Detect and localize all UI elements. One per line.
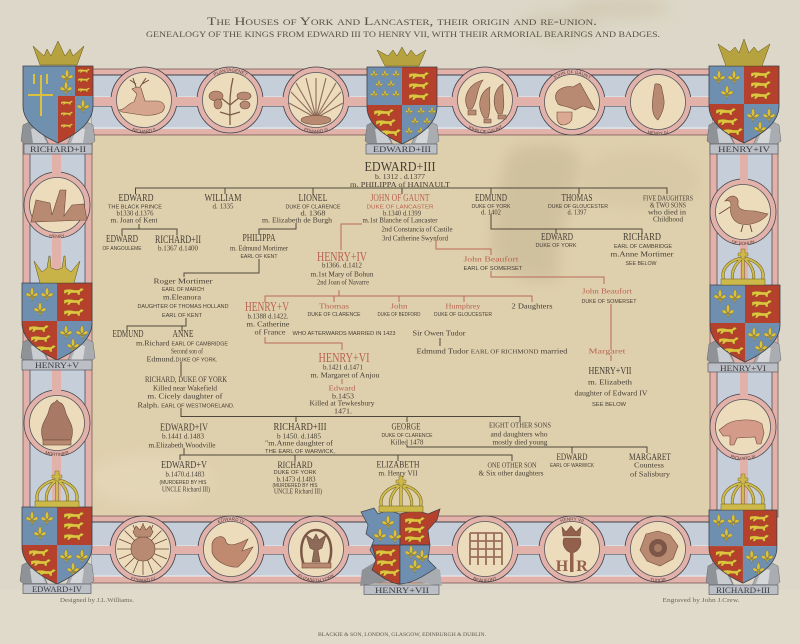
person: Richard II: b.1367 d.1400	[158, 244, 198, 252]
crown: Henry VII	[379, 476, 423, 512]
person: John of Gaunt: 2nd Constancia of Castile	[382, 224, 453, 234]
person: Humphrey of Gloucester	[434, 302, 492, 318]
person: Edward the Black Prince: m. Joan of Kent	[110, 216, 158, 224]
person: Edward Earl of Warwick: EARL OF WARWICK	[550, 463, 595, 469]
banner: Edward III: EDWARD+III	[373, 144, 431, 154]
person: John Beaufort Duke of Somerset: John Beaufort	[582, 286, 633, 296]
person: John Beaufort Earl of Somerset: EARL OF SOMERSET	[464, 266, 522, 272]
medallion: Plantagenet broom: PLANTAGENET	[213, 68, 248, 76]
panel: right border column	[710, 137, 778, 518]
medallion: Edward IV lion-swan: EDWARD IV	[218, 517, 245, 524]
medallion: Edward IV rose en soleil	[115, 521, 171, 582]
person: Richard Duke of York: Ralph. EARL OF WESTMORELAND.	[138, 400, 234, 410]
medallion: Henry badge	[29, 177, 88, 238]
person: Edward Duke of York: DUKE OF YORK	[536, 243, 577, 249]
medallion: Edward III sunburst: EDWARD III	[304, 128, 328, 133]
panel: central genealogy background	[90, 135, 710, 517]
person: Anne Mortimer: ANNE	[172, 329, 194, 340]
connectors: black lineage lines	[122, 188, 667, 461]
person: Thomas of Clarence: Thomas	[319, 302, 349, 310]
person: Richard Duke of York	[138, 374, 234, 410]
person: Edward the Black Prince: b1330 d.1376	[116, 208, 154, 218]
person: Richard II: RICHARD+II	[155, 232, 201, 246]
person: Richard Duke of York: DUKE OF YORK	[274, 470, 317, 476]
medallion: Henry badge: HENRY	[49, 234, 64, 238]
person: Thomas Duke of Gloucester: d. 1397	[568, 208, 587, 216]
person: Richard Duke of York: m. Cicely daughter of	[148, 392, 223, 400]
person: William: d. 1335	[212, 202, 234, 210]
person: Edward IV: b.1441 d.1483	[162, 432, 204, 440]
person: Richard III: b 1450. d.1485	[277, 432, 321, 440]
person: Edmund Duke of York: d. 1402	[481, 208, 501, 216]
medallion: John of Gaunt falcon: JOHN OF GAUNT	[554, 70, 592, 80]
shield: Henry VI	[707, 249, 781, 373]
person: Thomas Duke of Gloucester: DUKE OF GLOUCESTER	[548, 204, 608, 210]
person: Edmund Mortimer: EDMUND	[112, 329, 144, 340]
person: Edward Earl of Warwick: EDWARD	[556, 452, 588, 462]
medallion: Mortimer badge: MORTIMER	[45, 450, 69, 456]
medallion: Edward III sunburst	[288, 72, 344, 133]
person: Humphrey of Gloucester: DUKE OF GLOUCESTER	[434, 312, 492, 318]
banner: Henry V: HENRY+V	[35, 360, 80, 370]
person: Eight other sons	[489, 420, 551, 446]
person: Margaret Countess of Salisbury: MARGARET	[629, 452, 671, 462]
person: Henry V: HENRY+V	[245, 300, 289, 315]
panel: top border band	[92, 66, 712, 136]
person: Anne Mortimer	[136, 329, 229, 364]
person: Roger Mortimer	[138, 276, 229, 319]
person: Eight other sons: mostly died young	[492, 438, 548, 446]
person: Henry IV: b1366. d.1412	[322, 260, 362, 270]
crown: Edward III	[377, 47, 426, 66]
person: Edward Earl of Warwick	[550, 452, 595, 469]
person: Edward of Lancaster: 1471.	[334, 406, 352, 416]
title: The Houses of York and Lancaster, their origin and re-union.	[207, 16, 597, 28]
person: Thomas Duke of Gloucester	[548, 193, 608, 216]
person: Anne Mortimer: Edmund. DUKE OF YORK.	[146, 354, 218, 364]
medallion: Henry VII thistle: R	[576, 558, 588, 575]
person: Edward III: EDWARD+III	[364, 160, 436, 175]
person: Margaret Countess of Salisbury	[629, 452, 671, 478]
person: Henry V: m. Catherine	[246, 320, 290, 328]
medallion: Henry IV badge	[630, 74, 686, 135]
person: Henry IV: HENRY+IV	[317, 250, 367, 265]
medallion: De Bohun swan	[715, 184, 771, 245]
shield: Edward IV	[20, 471, 94, 594]
person: Eight other sons: EIGHT OTHER SONS	[489, 420, 551, 430]
person: Five daughters and two sons: Childhood	[653, 214, 683, 224]
person: Edward the Black Prince	[108, 193, 163, 224]
medallion: Edward IV lion-swan	[203, 517, 259, 577]
medallion: Tudor rose	[630, 521, 686, 582]
medallion: John of Gaunt falcon	[544, 70, 600, 130]
person: Richard Earl of Cambridge: RICHARD	[623, 232, 661, 243]
person: Edward Duke of York: EDWARD	[541, 232, 573, 243]
person: Edward III	[350, 160, 450, 189]
subtitle: GENEALOGY OF THE KINGS FROM EDWARD III TO HENRY VII, WITH THEIR ARMORIAL BEARINGS AND BADGES.	[146, 29, 660, 39]
person: Richard Duke of York: RICHARD, DUKE OF YORK	[145, 374, 228, 384]
shield: Richard II	[21, 41, 95, 154]
person: Richard Earl of Cambridge: EARL OF CAMBRIDGE	[614, 244, 673, 250]
person: John of Bedford: DUKE OF BEDFORD	[378, 312, 421, 318]
person: Richard Duke of York: (MURDERED BY HIS	[272, 483, 318, 489]
person: Richard Earl of Cambridge: SEE BELOW	[626, 261, 657, 267]
person: Richard Duke of York	[272, 460, 322, 496]
person: Edward of Angouleme: EDWARD	[106, 234, 138, 245]
person: Edmund Duke of York: DUKE OF YORK	[472, 204, 511, 210]
person: Edward V: (MURDERED BY HIS	[160, 480, 207, 486]
person: Richard Earl of Cambridge: m.Anne Mortimer	[610, 250, 674, 258]
credit: publisher: BLACKIE & SON, LONDON, GLASGOW, EDINBURGH & DUBLIN.	[318, 632, 487, 638]
person: Henry VII: daughter of Edward IV	[574, 388, 648, 398]
person: Edward IV	[148, 422, 216, 450]
person: Lionel	[262, 193, 341, 224]
person: Richard III: "m.Anne daughter of	[265, 438, 334, 448]
person: Philippa: PHILIPPA	[242, 233, 276, 244]
person: Five daughters and two sons	[643, 194, 693, 224]
medallion: De Bohun swan: DE BOHUN	[732, 240, 754, 245]
person: Edward of Angouleme	[102, 234, 142, 252]
person: Eight other sons: and daughters who	[490, 430, 548, 438]
medallion: Henry VII thistle: H	[556, 558, 569, 575]
medallion: Henry VII thistle: HENRY VII	[560, 517, 584, 523]
medallion: John of Gaunt feathers: JOHN OF GAUNT	[468, 125, 502, 133]
person: Henry VI: m. Margaret of Anjou	[310, 370, 380, 380]
person: Philippa	[230, 233, 288, 260]
person: Anne Mortimer: Second son of	[171, 346, 203, 356]
person: Roger Mortimer: EARL OF KENT	[162, 313, 202, 319]
person: John of Bedford	[378, 302, 421, 318]
crown: Richard III	[721, 474, 765, 510]
person: Edmund Duke of York: EDMUND	[475, 193, 507, 204]
banner: Henry VI: HENRY+VI	[720, 363, 766, 373]
person: Philippa: m. Edmund Mortimer	[230, 244, 288, 252]
shield: Henry VII	[360, 476, 442, 595]
medallion: Henry IV badge: HENRY IV	[648, 130, 668, 135]
person: Edward of Lancaster: Edward	[328, 384, 356, 392]
crown: Henry V	[34, 256, 80, 283]
crown: Edward IV	[35, 471, 79, 507]
person: John of Gaunt	[362, 193, 453, 242]
crown: Henry IV	[718, 39, 770, 66]
person: Lionel: d. 1368	[300, 208, 326, 218]
person: Edward V: UNCLE Richard III)	[162, 484, 210, 494]
person: Margaret Countess of Salisbury: Countess	[634, 460, 664, 470]
person: Thomas of Clarence	[308, 302, 361, 318]
crown: Richard II	[33, 41, 84, 65]
person: Edward V	[160, 459, 210, 494]
person: Edward of Lancaster: Killed at Tewkesbury	[310, 398, 375, 408]
person: Henry IV: m.1st Mary of Bohun	[310, 270, 374, 278]
crown: Henry VI	[721, 249, 765, 285]
person: Lionel: m. Elizabeth de Burgh	[262, 216, 332, 224]
person: John Beaufort Duke of Somerset	[582, 286, 636, 305]
credit: engraver: Engraved by John J.Crew.	[662, 598, 740, 604]
person: Edmund Tudor: Edmund Tudor EARL OF RICHMOND married	[416, 346, 568, 356]
person: Edward Duke of York	[536, 232, 577, 249]
person: Edward V: b.1470.d.1483	[166, 470, 205, 478]
person: One other son: & Six other daughters	[478, 468, 544, 478]
person: Richard Earl of Cambridge	[610, 232, 674, 267]
person: Thomas Duke of Gloucester: THOMAS	[562, 193, 592, 204]
person: Edward IV: m.Elizabeth Woodville	[148, 440, 216, 450]
banner: Edward IV: EDWARD+IV	[32, 584, 83, 594]
credit: designer: Designed by J.L.Williams.	[60, 598, 135, 604]
person: John of Gaunt: DUKE OF LANCASTER	[366, 204, 434, 210]
person: Henry V: of France	[254, 328, 286, 336]
person: William	[204, 193, 242, 210]
person: John of Gaunt: 3rd Catherine Swynford	[382, 234, 448, 242]
shield: Richard III	[706, 474, 780, 595]
person: Lionel: DUKE OF CLARENCE	[286, 204, 341, 210]
person: Henry VI: b.1421 d.1471	[323, 362, 363, 372]
medallion: Elizabeth of York falcon and fetterlock: ELIZABETH YORK	[298, 574, 334, 582]
medallion: Beaufort portcullis	[457, 521, 513, 582]
person: George Duke of Clarence: DUKE OF CLARENCE	[382, 433, 433, 439]
person: Five daughters and two sons: FIVE DAUGHTERS	[643, 194, 693, 202]
person: Richard II	[155, 232, 201, 252]
medallion: Richard II white hart	[116, 72, 172, 133]
person: Richard Duke of York: RICHARD	[278, 460, 313, 470]
person: Henry VII: HENRY+VII	[588, 365, 632, 377]
connectors: red Lancaster lines	[265, 224, 611, 384]
person: Philippa: EARL OF KENT	[240, 254, 278, 260]
person: Henry V: b.1388 d.1422.	[248, 312, 289, 320]
person: Edward the Black Prince: THE BLACK PRINCE	[108, 204, 163, 210]
person: Henry VII: SEE BELOW	[592, 402, 626, 408]
person: Thomas of Clarence: DUKE OF CLARENCE	[308, 312, 361, 318]
person: Richard Duke of York: Killed near Wakefield	[153, 384, 217, 392]
person: Humphrey of Gloucester: Humphrey	[446, 302, 481, 310]
medallion: Plantagenet broom	[202, 68, 258, 128]
person: One other son: ONE OTHER SON	[488, 460, 537, 470]
medallion: Richard III boar	[715, 399, 771, 460]
medallion: Mortimer badge	[29, 395, 85, 456]
person: Sir Owen Tudor: Sir Owen Tudor	[412, 328, 466, 338]
person: George Duke of Clarence: GEORGE	[392, 422, 421, 432]
medallion: Elizabeth of York falcon and fetterlock	[288, 521, 344, 582]
person: Elizabeth of York: ELIZABETH	[376, 460, 420, 470]
person: Edward of Angouleme: OF ANGOULEME	[102, 246, 142, 252]
person: Edmund Duke of York	[472, 193, 511, 216]
person: John Beaufort Earl of Somerset	[464, 254, 522, 272]
person: Henry IV	[310, 250, 374, 286]
person: George Duke of Clarence: Killed 1478	[390, 438, 424, 446]
person: Elizabeth of York	[376, 460, 420, 478]
person: Henry VII	[574, 365, 648, 408]
person: Edward III: m. PHILIPPA of HAINAULT	[350, 180, 450, 189]
panel: bottom border band	[92, 516, 712, 584]
person: Lionel: LIONEL	[298, 193, 328, 204]
medallion: Edward IV rose en soleil: EDWARD IV	[130, 576, 154, 582]
person: Richard III: RICHARD+III	[274, 421, 327, 433]
person: Roger Mortimer: Roger Mortimer	[154, 276, 213, 286]
banner: Henry IV: HENRY+IV	[718, 144, 771, 154]
person: 2 Daughters: 2 Daughters	[512, 302, 553, 310]
person: Henry V: WHO AFTERWARDS MARRIED IN 1423	[292, 331, 396, 337]
person: George Duke of Clarence	[382, 422, 433, 446]
medallion: Henry VII thistle	[544, 517, 600, 577]
person: John of Gaunt: JOHN OF GAUNT	[370, 193, 430, 204]
shield: Edward III	[365, 47, 439, 154]
person: Margaret Countess of Salisbury: of Salisbury	[630, 470, 670, 478]
person: John of Gaunt: m.1st Blanche of Lancaster	[362, 216, 438, 224]
person: Anne Mortimer: m.Richard EARL OF CAMBRIDGE	[136, 338, 229, 348]
panel: left border column	[22, 137, 92, 516]
person: John Beaufort Duke of Somerset: DUKE OF SOMERSET	[582, 299, 636, 305]
person: William: WILLIAM	[204, 193, 242, 204]
person: John of Gaunt: b.1340 d.1399	[383, 208, 421, 218]
medallion: Beaufort portcullis: BEAUFORT	[473, 576, 496, 582]
person: Richard Duke of York: UNCLE Richard III)	[274, 486, 322, 496]
person: Henry VI	[310, 351, 380, 380]
person: Margaret Beaufort: Margaret	[588, 346, 627, 356]
shield: Henry V	[21, 256, 95, 370]
person: Henry V	[245, 300, 396, 337]
shield: Henry IV	[707, 39, 781, 154]
person: Henry IV: 2nd Joan of Navarre	[317, 278, 370, 286]
person: Edward of Lancaster	[310, 384, 375, 416]
person: Henry VI: HENRY+VI	[318, 351, 370, 366]
person: John Beaufort Earl of Somerset: John Beaufort	[464, 254, 520, 264]
medallion: John of Gaunt feathers	[457, 72, 513, 133]
person: Edward V: EDWARD+V	[161, 459, 207, 471]
person: Roger Mortimer: EARL OF MARCH	[162, 287, 204, 293]
medallion: Richard III boar: RICHARD III	[730, 454, 756, 460]
medallion: Tudor rose: TUDOR	[650, 578, 666, 582]
banner: Henry VII: HENRY+VII	[375, 585, 429, 595]
person: Edward IV: EDWARD+IV	[160, 422, 208, 434]
person: Richard III: THE EARL OF WARWICK,	[265, 449, 335, 455]
person: Roger Mortimer: m.Eleanora	[163, 292, 202, 302]
person: Elizabeth of York: m. Henry VII	[378, 468, 418, 478]
person: Edward III: b. 1312 . d.1377	[375, 172, 425, 181]
person: Edward of Lancaster: b.1453	[332, 392, 354, 400]
person: Richard III	[265, 421, 335, 455]
person: Five daughters and two sons: who died in	[648, 208, 686, 216]
person: Henry VII: m. Elizabeth	[588, 378, 632, 386]
person: Richard Duke of York: b.1473 d.1483	[276, 474, 316, 484]
person: One other son	[478, 460, 544, 478]
person: Edward the Black Prince: EDWARD	[118, 193, 154, 204]
person: Five daughters and two sons: & TWO SONS	[650, 200, 686, 210]
person: Roger Mortimer: DAUGHTER OF THOMAS HOLLAND	[138, 304, 229, 310]
medallion: Richard II white hart: RICHARD II	[132, 128, 156, 133]
person: John of Bedford: John	[390, 302, 408, 310]
banner: Richard II: RICHARD+II	[30, 144, 86, 154]
banner: Richard III: RICHARD+III	[716, 585, 770, 595]
